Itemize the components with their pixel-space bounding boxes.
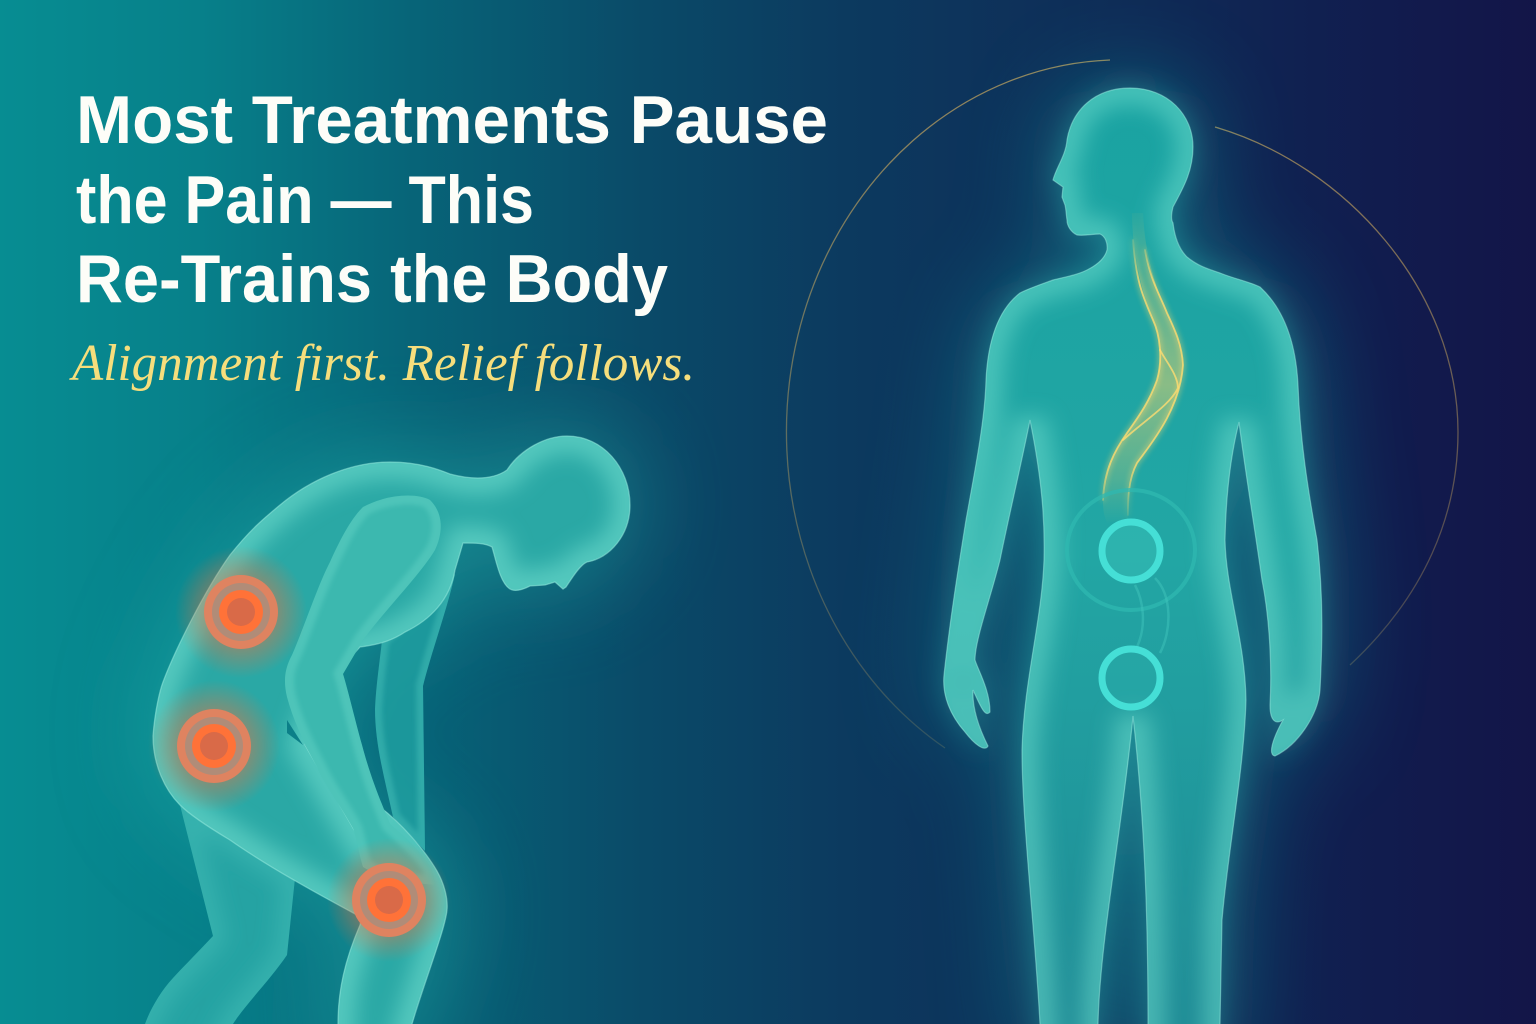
figure: upright aligned person xyxy=(944,88,1322,1024)
decorative halo arc xyxy=(786,60,1458,748)
alignment node: pelvis xyxy=(1102,649,1160,707)
connectors between nodes xyxy=(1135,578,1168,653)
torso, head and front leg xyxy=(153,436,630,1024)
figure: hunched person in pain xyxy=(120,436,630,1024)
spine energy ribbon xyxy=(1103,213,1183,523)
far arm xyxy=(375,574,455,851)
figure glow xyxy=(944,88,1322,1024)
title: the Pain — This xyxy=(76,162,534,238)
title: Most Treatments Pause xyxy=(76,82,828,158)
figure glow xyxy=(153,436,630,1024)
title: Re-Trains the Body xyxy=(76,241,668,317)
body silhouette xyxy=(944,88,1322,1024)
tagline: Alignment first. Relief follows. xyxy=(69,335,695,392)
rear leg xyxy=(145,806,295,1024)
pain point: knee xyxy=(327,838,451,962)
wedge between torso and arm xyxy=(287,720,303,745)
pain point: upper back xyxy=(175,546,307,678)
near arm xyxy=(285,496,441,885)
alignment node: lower spine xyxy=(1067,490,1195,610)
pain point: hip xyxy=(148,680,280,812)
wide teal aura xyxy=(944,88,1322,1024)
